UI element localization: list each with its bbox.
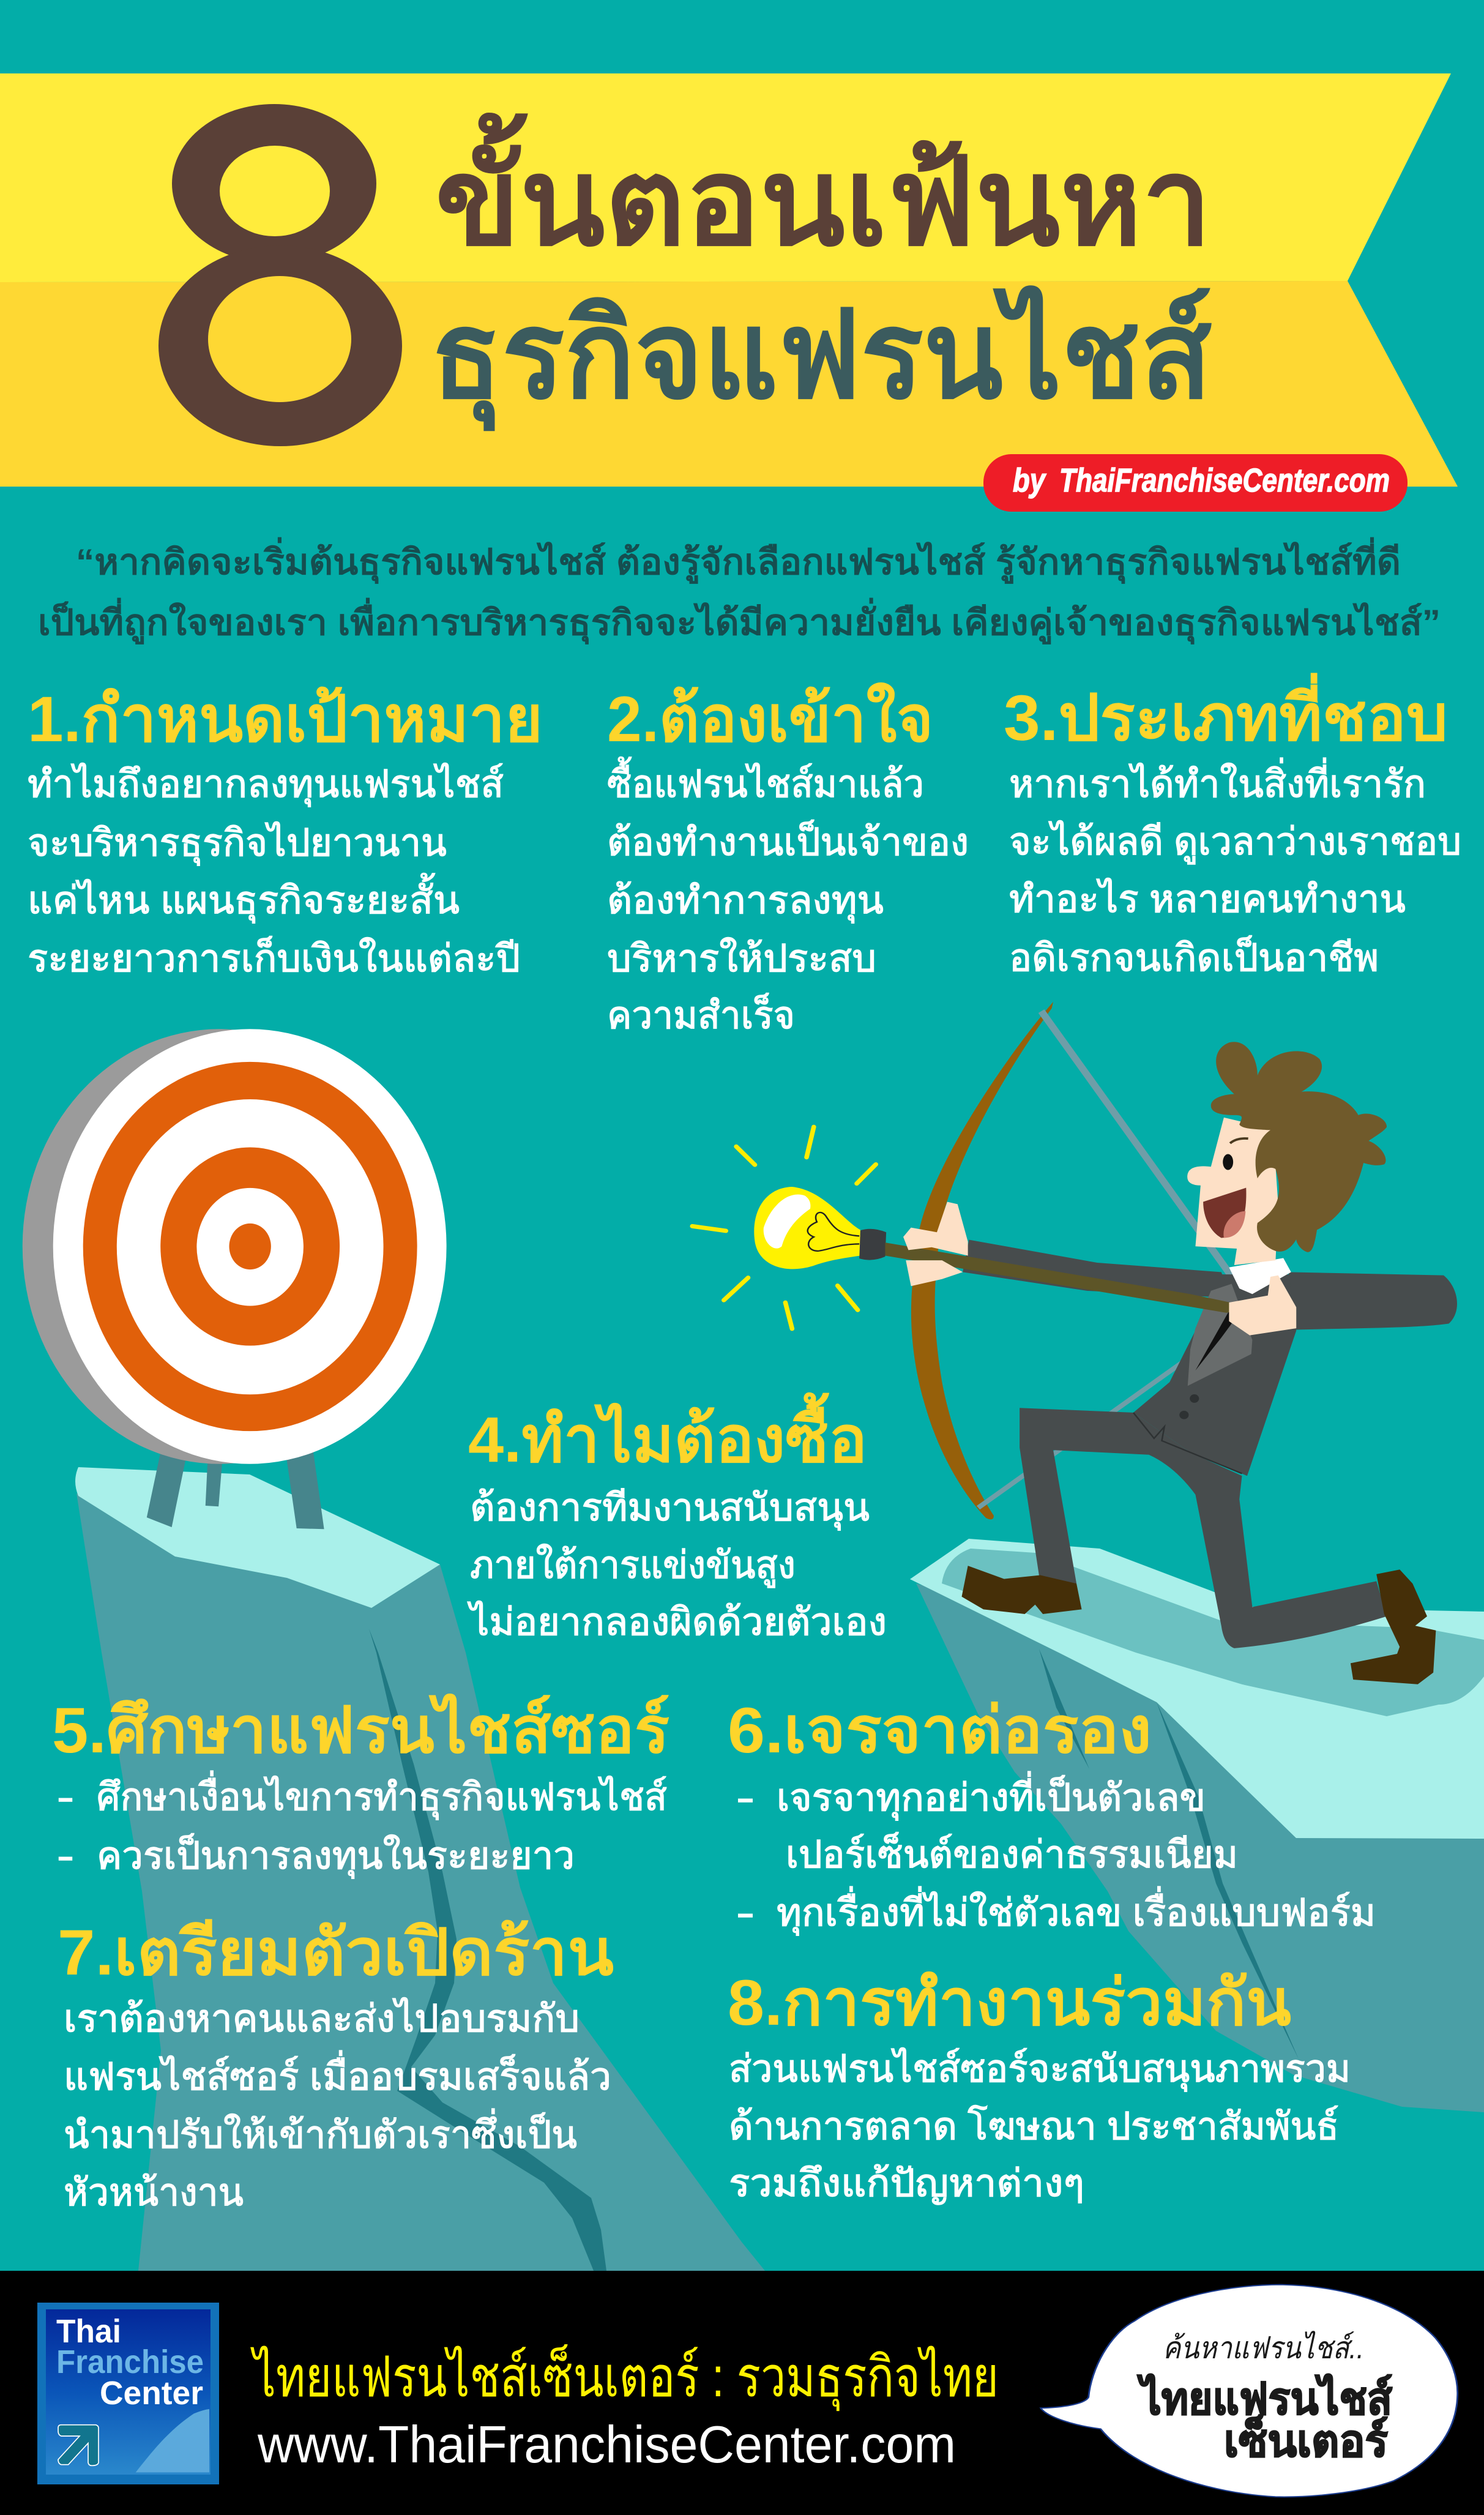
footer xyxy=(0,2271,1484,2515)
title line 2: ธุรกิจแฟรนไชส์ xyxy=(431,285,1212,432)
step 6: เจรจาทุกอย่างที่เป็นตัวเลข xyxy=(777,1771,1206,1820)
title banner xyxy=(0,73,1458,512)
left cliff with target xyxy=(23,1029,765,2271)
step 7: หัวหน้างาน xyxy=(64,2172,244,2214)
light bulb xyxy=(754,1187,886,1269)
step 1: 1.กำหนดเป้าหมาย xyxy=(28,684,543,755)
step 2 xyxy=(607,682,969,1037)
step 6: 6.เจรจาต่อรอง xyxy=(728,1695,1152,1766)
step 6: เปอร์เซ็นต์ของค่าธรรมเนียม xyxy=(786,1832,1238,1876)
step 7: แฟรนไชส์ซอร์ เมื่ออบรมเสร็จแล้ว xyxy=(64,2050,611,2098)
step 6: - xyxy=(736,1892,755,1934)
step 4: ไม่อยากลองผิดด้วยตัวเอง xyxy=(467,1601,887,1643)
step 5: ศึกษาเงื่อนไขการทำธุรกิจแฟรนไชส์ xyxy=(97,1771,667,1820)
footer url: www.ThaiFranchiseCenter.com xyxy=(257,2416,956,2474)
step 3: ทำอะไร หลายคนทำงาน xyxy=(1009,878,1406,921)
step 3 xyxy=(1004,673,1461,979)
step 8: รวมถึงแก้ปัญหาต่างๆ xyxy=(729,2162,1084,2205)
step 1: จะบริหารธุรกิจไปยาวนาน xyxy=(28,821,447,865)
step 8: ส่วนแฟรนไชส์ซอร์จะสนับสนุนภาพรวม xyxy=(729,2047,1351,2091)
right cliff shaded top xyxy=(942,1549,1484,1716)
step 2: 2.ต้องเข้าใจ xyxy=(607,682,933,755)
banner upper band xyxy=(0,73,1451,282)
step 2: ความสำเร็จ xyxy=(607,993,795,1037)
step 2: ต้องทำการลงทุน xyxy=(607,880,884,923)
banner lower band xyxy=(0,281,1458,487)
shoes xyxy=(962,1566,1436,1684)
suit torso and arms xyxy=(963,1240,1457,1476)
intro quote xyxy=(38,537,1441,645)
step 7: นำมาปรับให้เข้ากับตัวเราซึ่งเป็น xyxy=(64,2109,577,2156)
right cliff top xyxy=(910,1539,1484,1839)
step 5: - xyxy=(57,1776,74,1818)
target board xyxy=(23,1029,447,1529)
speech bubble xyxy=(1041,2285,1458,2497)
left cliff top xyxy=(75,1467,440,1608)
arrow shaft xyxy=(885,1243,1253,1313)
step 6 xyxy=(728,1695,1376,1935)
step 8 xyxy=(728,1967,1351,2205)
step 4 xyxy=(467,1392,887,1643)
right cliff cracks xyxy=(1039,1649,1299,2059)
step 3: อดิเรกจนเกิดเป็นอาชีพ xyxy=(1009,935,1379,979)
jacket lapel and shirt xyxy=(1133,1258,1291,1473)
logo: Franchise xyxy=(56,2344,204,2380)
by line pill: by xyxy=(1013,462,1046,499)
step 8: ด้านการตลาด โฆษณา ประชาสัมพันธ์ xyxy=(729,2105,1339,2148)
step 2: ซื้อแฟรนไชส์มาแล้ว xyxy=(607,757,924,805)
intro quote: เป็นที่ถูกใจของเรา เพื่อการบริหารธุรกิจจะได้มีความยั่งยืน เคียงคู่เจ้าของธุรกิจแฟรนไชส์” xyxy=(38,597,1441,645)
step 2: บริหารให้ประสบ xyxy=(607,937,876,980)
step 1: ทำไมถึงอยากลงทุนแฟรนไชส์ xyxy=(28,763,504,807)
step 4: ภายใต้การแข่งขันสูง xyxy=(470,1544,796,1588)
bow string xyxy=(979,1011,1242,1508)
step 7: เราต้องหาคนและส่งไปอบรมกับ xyxy=(64,1997,580,2040)
archer illustration xyxy=(692,1002,1457,1684)
step 3: หากเราได้ทำในสิ่งที่เรารัก xyxy=(1009,758,1426,805)
intro quote: “หากคิดจะเริ่มต้นธุรกิจแฟรนไชส์ ต้องรู้จักเลือกแฟรนไชส์ รู้จักหาธุรกิจแฟรนไชส์ที่ดี xyxy=(76,537,1401,585)
right cliff xyxy=(910,1539,1484,2112)
hands xyxy=(903,1202,1296,1336)
step 3: จะได้ผลดี ดูเวลาว่างเราชอบ xyxy=(1009,820,1461,864)
right cliff body xyxy=(916,1583,1484,2112)
step 5: - xyxy=(57,1835,74,1877)
step 8: 8.การทำงานร่วมกัน xyxy=(728,1967,1291,2039)
step 1: แค่ไหน แผนธุรกิจระยะสั้น xyxy=(28,873,460,923)
step 5: ควรเป็นการลงทุนในระยะยาว xyxy=(97,1833,575,1878)
step 4: 4.ทำไมต้องซื้อ xyxy=(468,1392,867,1476)
step 4: ต้องการทีมงานสนับสนุน xyxy=(470,1487,870,1530)
left cliff crack xyxy=(369,1629,606,2271)
footer thai name: ไทยแฟรนไชส์เซ็นเตอร์ : รวมธุรกิจไทย xyxy=(250,2344,999,2412)
footer background xyxy=(0,2271,1484,2515)
step 5 xyxy=(52,1694,669,1878)
step 1 xyxy=(28,684,543,980)
step 5: 5.ศึกษาแฟรนไชส์ซอร์ xyxy=(52,1694,669,1766)
numeral 8 glyph shape xyxy=(158,104,402,446)
left cliff body xyxy=(76,1493,765,2271)
step 7 xyxy=(58,1917,614,2214)
logo: Center xyxy=(100,2375,203,2412)
step 3: 3.ประเภทที่ชอบ xyxy=(1004,673,1448,754)
target rings xyxy=(23,1029,447,1464)
by line pill xyxy=(983,454,1408,512)
speech bubble: ไทยแฟรนไชส์ xyxy=(1136,2373,1392,2424)
speech bubble: ค้นหาแฟรนไชส์.. xyxy=(1163,2331,1364,2365)
logo xyxy=(37,2303,219,2484)
suit legs xyxy=(1020,1408,1387,1648)
by line pill: ThaiFranchiseCenter.com xyxy=(1059,462,1390,499)
head xyxy=(1187,1042,1387,1265)
step 2: ต้องทำงานเป็นเจ้าของ xyxy=(607,820,969,864)
target stands xyxy=(147,1451,324,1529)
speech bubble: เซ็นเตอร์ xyxy=(1224,2415,1388,2466)
step 6: ทุกเรื่องที่ไม่ใช่ตัวเลข เรื่องแบบฟอร์ม xyxy=(777,1886,1376,1935)
bow xyxy=(911,1002,1053,1519)
step 1: ระยะยาวการเก็บเงินในแต่ละปี xyxy=(28,936,520,980)
title line 1: ขั้นตอนเฟ้นหา xyxy=(435,112,1212,271)
step 6: - xyxy=(736,1777,755,1819)
step 7: 7.เตรียมตัวเปิดร้าน xyxy=(58,1917,614,1989)
logo: Thai xyxy=(56,2313,121,2350)
light bulb rays xyxy=(692,1127,876,1329)
